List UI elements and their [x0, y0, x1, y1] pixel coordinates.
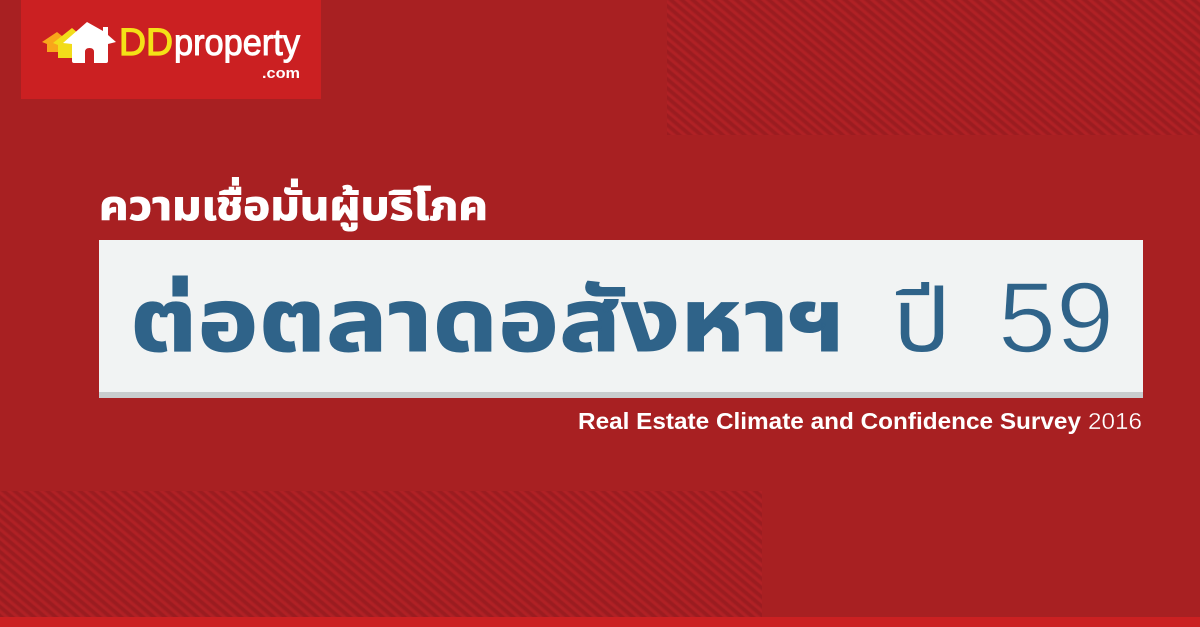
logo text .com: .com — [262, 65, 300, 82]
title: property market: ต่อตลาดอสังหาฯ — [130, 271, 845, 370]
pattern: top right stripes — [667, 0, 1200, 135]
logo: DDproperty — [42, 22, 300, 82]
icon: white house — [63, 22, 116, 63]
title: year number: 59 — [998, 262, 1114, 374]
bottom bar — [0, 617, 1200, 627]
logo text property: property — [174, 22, 300, 63]
title: year word: ปี — [893, 271, 951, 370]
subtitle: survey name: Real Estate Climate and Confidence Survey — [578, 408, 1081, 434]
heading: consumer confidence: ความเชื่อมั่นผู้บริโภค — [99, 177, 488, 231]
logo text DD: DD — [119, 22, 173, 64]
title panel — [99, 240, 1143, 398]
subtitle: year: 2016 — [1088, 408, 1142, 434]
icon: yellow house — [53, 28, 84, 58]
logo panel — [21, 0, 321, 99]
icon: orange house — [42, 32, 70, 52]
pattern: bottom left stripes — [0, 491, 762, 617]
